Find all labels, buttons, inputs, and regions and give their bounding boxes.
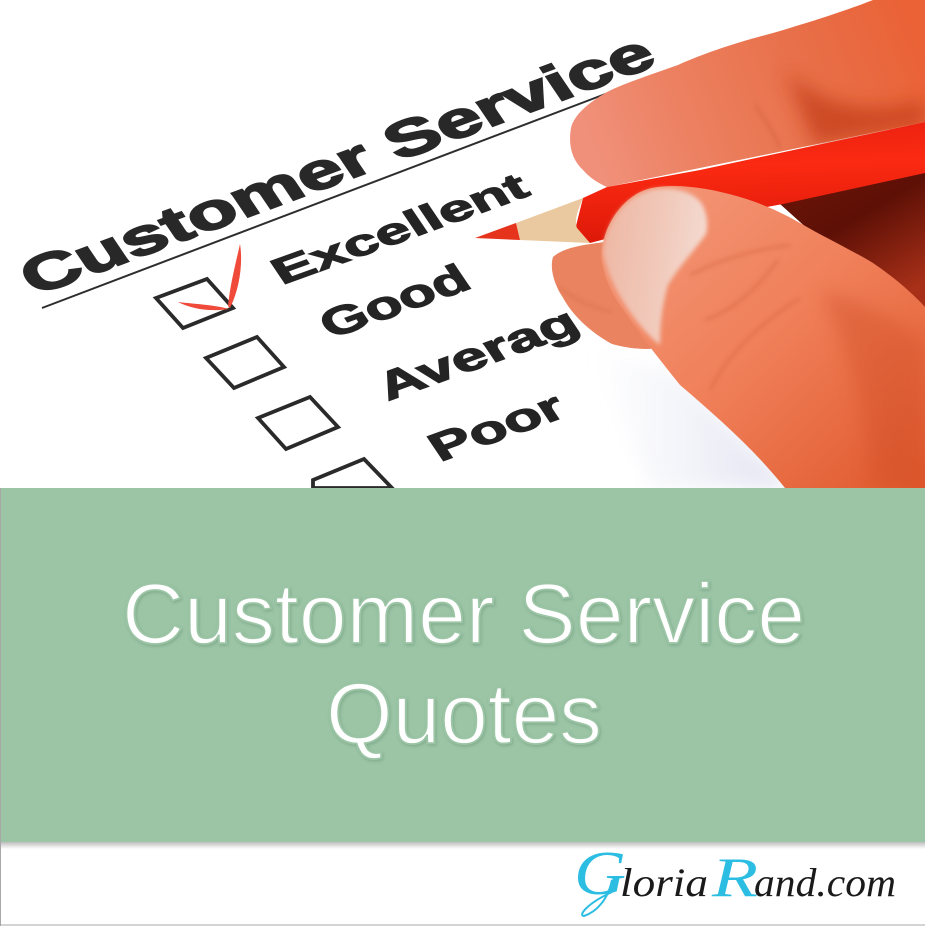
thumb shadow side (820, 290, 925, 488)
checkbox: good (206, 337, 284, 388)
panel shadow strip (1, 842, 925, 849)
index finger and back of hand (570, 0, 925, 187)
middle finger fold (560, 288, 612, 312)
option label: Average: Averag (367, 299, 588, 408)
panel: green title band (1, 488, 925, 842)
dark shadow between hand and pencil (770, 165, 925, 320)
pencil red tip (475, 223, 520, 240)
finger knuckle shading (785, 70, 925, 145)
option label: Good: Good (310, 256, 479, 346)
logo: GloriaRand.com (574, 840, 896, 916)
checkbox: poor (313, 459, 392, 488)
title: Quotes (326, 667, 602, 762)
logo text: loria: loria (620, 860, 708, 905)
pencil body (576, 122, 925, 243)
pencil wood cone (516, 198, 590, 243)
checkbox: average (258, 397, 338, 449)
checkbox: excellent, ticked (156, 244, 241, 328)
heading underline (42, 93, 608, 308)
logo letter R: R (711, 847, 758, 909)
thumb (602, 186, 925, 488)
title (122, 567, 805, 762)
icon: red check mark (178, 244, 241, 310)
footer frame lines (0, 488, 925, 926)
finger crease (755, 105, 780, 148)
photo paper shadow (590, 345, 790, 488)
logo letter G: G (574, 840, 626, 908)
title: Customer Service (122, 567, 805, 662)
middle finger below pencil (552, 240, 680, 349)
thumb knuckle crease (690, 245, 800, 390)
G descender swash (582, 880, 612, 916)
checklist heading: Customer Service: Customer Service (8, 24, 666, 306)
option label: Excellent: Excellent (263, 166, 537, 292)
photo: customer service checklist with hand and pencil (8, 0, 925, 488)
option label: Poor: Poor (419, 384, 574, 469)
thumb nail (603, 189, 707, 345)
logo text: and.com: and.com (754, 860, 896, 905)
